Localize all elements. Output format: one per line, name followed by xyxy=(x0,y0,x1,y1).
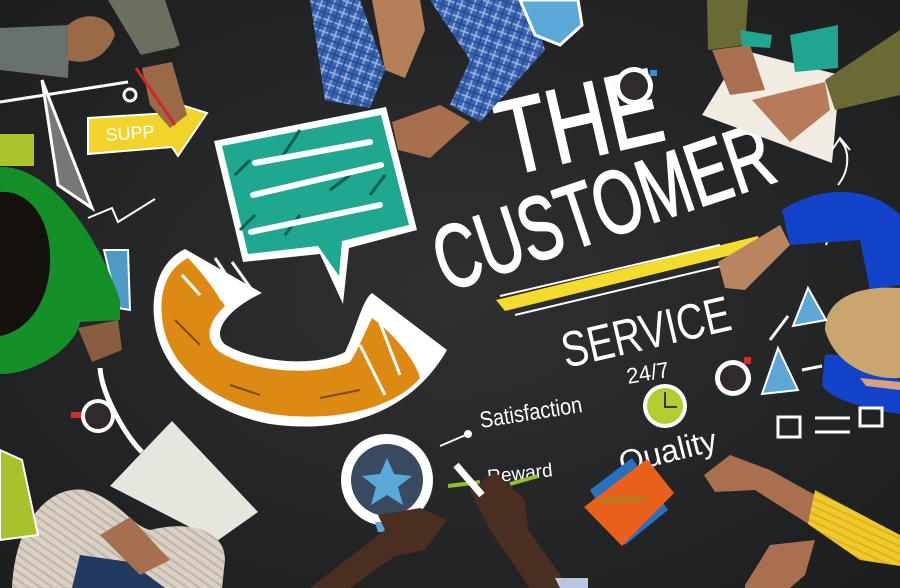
bottom-right person in yellow xyxy=(704,455,900,588)
text: Reward: Reward xyxy=(486,460,554,488)
chalk scribble xyxy=(88,199,155,222)
bottom centre hands xyxy=(310,465,588,588)
icon: satisfaction pointer xyxy=(440,430,472,446)
top-right person with paper xyxy=(702,0,900,245)
blue tag xyxy=(104,250,130,310)
paper lower left xyxy=(110,421,258,541)
icon: star badge xyxy=(341,434,433,532)
top-left person arm xyxy=(0,0,187,128)
icon: green speech bubble xyxy=(214,107,417,304)
chalk icons: people and arrows xyxy=(762,288,882,437)
text: 24/7: 24/7 xyxy=(625,357,671,389)
text: Satisfaction: Satisfaction xyxy=(478,391,584,433)
right person in blue xyxy=(718,192,900,414)
icon: coffee cup top xyxy=(615,67,657,105)
left green tag xyxy=(0,134,34,166)
icon: coffee cup right xyxy=(715,357,751,396)
icon: green clock xyxy=(643,384,687,428)
bottom-left person xyxy=(12,490,225,588)
bottom-left green tag xyxy=(0,450,38,540)
scale drawing xyxy=(0,80,136,208)
top centre person in blue check shirt xyxy=(310,0,582,158)
icon: coffee cup lower left xyxy=(71,399,115,433)
reward scribble xyxy=(448,476,538,486)
sign: support arrow xyxy=(88,103,207,156)
sign: support arrow: SUPP xyxy=(105,122,155,145)
icon: telephone handset xyxy=(154,249,447,427)
icon: notebooks xyxy=(584,458,674,546)
yellow underline xyxy=(496,236,760,315)
left person in green xyxy=(0,167,122,374)
arrow: chalk line xyxy=(100,368,142,452)
heading: SERVICE: SERVICE xyxy=(556,285,736,379)
title: THE: THE xyxy=(486,46,673,199)
text: Quality: Quality xyxy=(615,422,720,481)
